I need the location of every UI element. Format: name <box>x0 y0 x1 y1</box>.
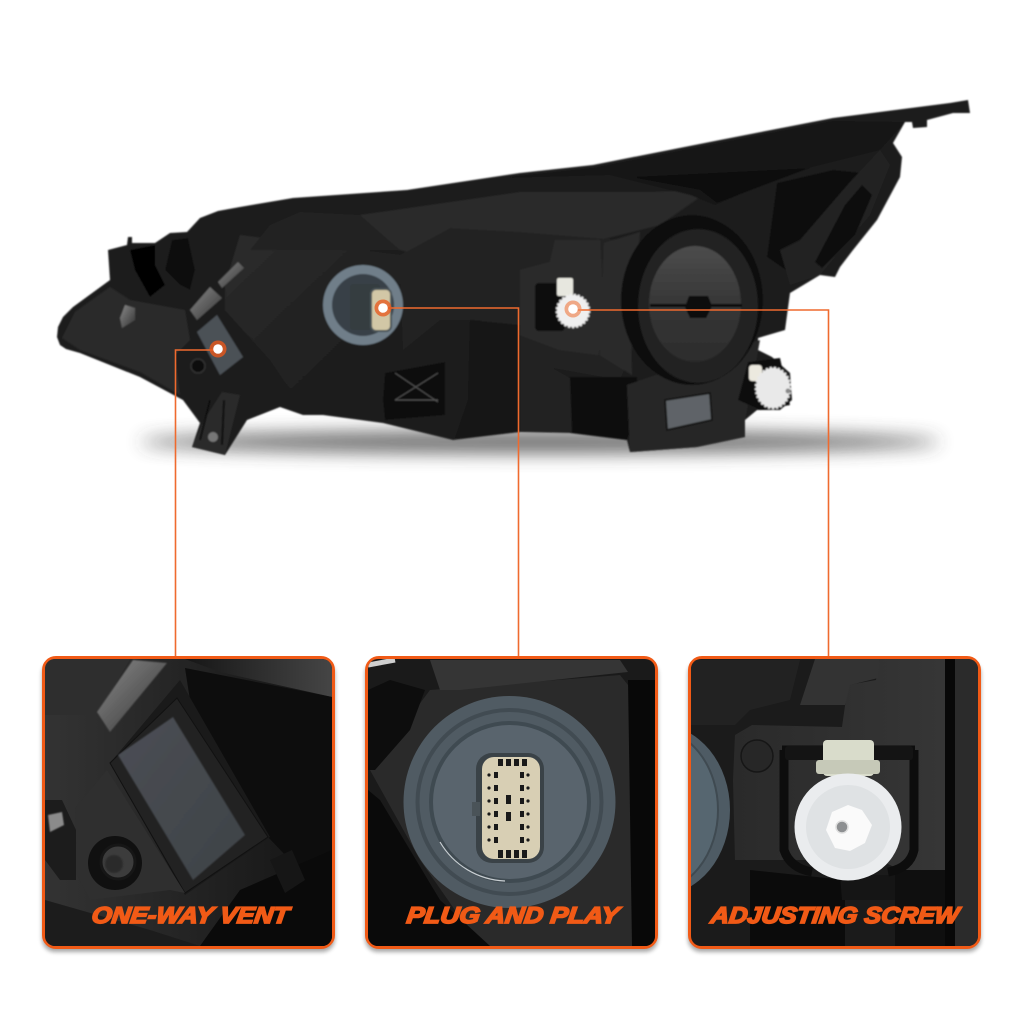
ground shadow <box>140 431 940 453</box>
cap outer ring <box>621 215 763 385</box>
panel shadow <box>688 661 981 952</box>
panel caption: ADJUSTING SCREW <box>708 902 963 928</box>
panel frame <box>367 658 656 947</box>
dark pillar <box>455 320 520 438</box>
x box <box>383 362 445 420</box>
panel frame <box>44 658 333 947</box>
housing right of connector <box>400 228 640 380</box>
label plate <box>665 393 712 430</box>
upper flange <box>500 121 905 205</box>
top centre panel <box>360 190 710 255</box>
headlight product photo <box>57 100 970 455</box>
callout line: adjusting screw <box>573 310 828 656</box>
panel: plug and play <box>365 658 658 952</box>
cap face <box>649 246 741 362</box>
inner rib cavity <box>815 185 872 268</box>
adjuster screw two <box>738 358 790 410</box>
headlight silhouette <box>57 100 970 455</box>
cap ring <box>638 229 758 383</box>
upper left cut-out <box>165 238 195 290</box>
panel photo <box>45 659 332 946</box>
cap bar <box>650 304 742 307</box>
top ridge <box>250 212 400 250</box>
vent <box>197 315 243 375</box>
marker: vent <box>210 340 226 358</box>
callout line: plug and play <box>383 308 518 656</box>
left lower wall <box>520 350 572 432</box>
panel: adjusting screw <box>686 656 984 954</box>
flange shadow <box>630 168 810 203</box>
vent hole <box>191 359 205 373</box>
marker: screw <box>564 300 582 318</box>
left lobe <box>62 287 190 395</box>
vent bump <box>190 287 222 320</box>
panel frame <box>690 658 979 947</box>
panel shadow <box>365 661 658 952</box>
vertical block <box>600 232 640 375</box>
connector ring <box>323 265 403 345</box>
right mid rib <box>780 150 890 285</box>
left bump <box>120 305 135 328</box>
cap nut <box>685 296 712 318</box>
lower bracket <box>192 392 240 455</box>
panel photo <box>691 659 978 946</box>
lower cavity <box>568 377 638 440</box>
callout line: one-way vent <box>176 350 218 656</box>
panel caption: PLUG AND PLAY <box>405 902 624 928</box>
second bump <box>218 262 244 288</box>
panel: one-way vent <box>42 658 335 952</box>
marker: connector <box>374 300 392 316</box>
right cavity <box>767 170 863 273</box>
adjuster screw one <box>535 278 589 331</box>
connector pins <box>371 289 391 331</box>
screw housing <box>520 240 605 355</box>
panel photo <box>368 659 655 946</box>
centre body <box>225 235 403 405</box>
connector body <box>350 284 380 330</box>
panel shadow <box>42 661 335 952</box>
upper left bracket cavity <box>130 245 165 297</box>
bottom step <box>627 340 760 452</box>
connector ring inner <box>332 274 394 336</box>
panel caption: ONE-WAY VENT <box>90 902 293 928</box>
